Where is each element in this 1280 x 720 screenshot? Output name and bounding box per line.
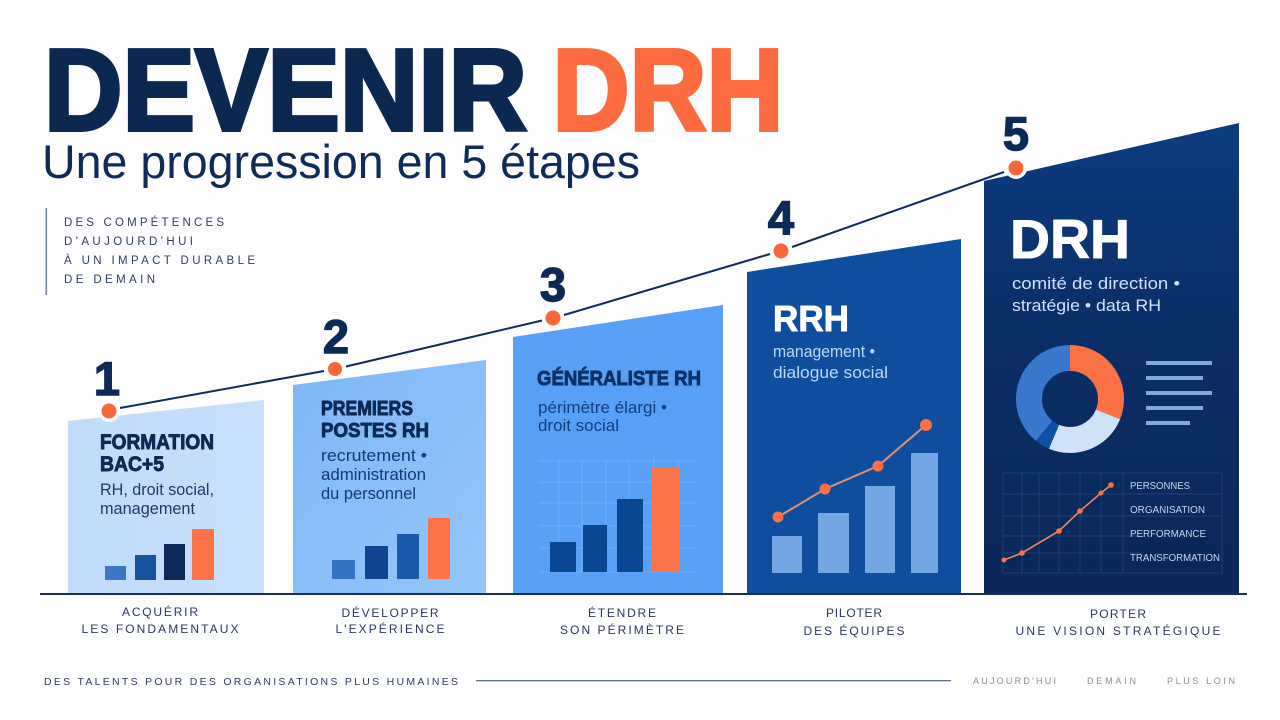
panel 2: premiers postes [293,360,486,594]
panel 4: RRH [747,239,961,594]
baseline [40,593,1247,595]
progression line [120,172,1004,408]
step marker 3: 3 [540,258,566,311]
panel 5: DRH: stratégie • data RH [1012,297,1161,315]
footer tagline: DES TALENTS POUR DES ORGANISATIONS PLUS HUMAINES [44,676,458,688]
caption 3: SON PÉRIMÈTRE [560,622,684,637]
caption 2: L'EXPÉRIENCE [336,621,444,636]
footer labels [973,676,1235,686]
panel 3: généraliste: GÉNÉRALISTE RH [537,367,701,390]
panel 2: premiers postes: du personnel [321,485,416,503]
line chart with grid [1002,473,1222,573]
panel 4: RRH: management • [773,343,875,361]
chart labels: PERFORMANCE [1130,529,1206,540]
caption 4 [804,606,904,638]
panel 5: DRH [984,123,1239,594]
subtitle: Une progression en 5 étapes [42,135,640,188]
intro text block: À UN IMPACT DURABLE [64,254,255,267]
panel 1: formation: RH, droit social, [100,481,214,499]
panel 2: premiers postes: PREMIERS [321,397,413,420]
panel 1: formation: FORMATION [100,431,214,454]
intro text block: DE DEMAIN [64,274,155,286]
chart labels: ORGANISATION [1130,505,1205,516]
panel 5: DRH: comité de direction • [1012,275,1180,293]
bar chart 1 [105,529,214,580]
panel 5: DRH: DRH [1010,208,1130,270]
caption 2: DÉVELOPPER [342,605,439,620]
caption 3: ÉTENDRE [588,605,656,620]
intro text block: D'AUJOURD'HUI [64,236,193,248]
bar and line chart 4 [772,419,938,573]
panel 1: formation: BAC+5 [100,453,164,476]
footer labels: AUJOURD'HUI [973,676,1056,686]
chart labels: PERSONNES [1130,481,1190,492]
panel 4: RRH: dialogue social [773,364,888,382]
step marker 4: 4 [768,191,794,244]
caption 5: PORTER [1090,607,1146,621]
chart labels: TRANSFORMATION [1130,553,1220,564]
donut chart [1029,358,1111,440]
caption 5 [1016,607,1220,638]
bar chart 2 [332,518,450,579]
caption 3 [560,605,684,637]
panel 4: RRH: RRH [773,298,849,339]
caption 4: PILOTER [826,606,882,620]
legend bars [1146,361,1212,425]
caption 5: UNE VISION STRATÉGIQUE [1016,623,1220,638]
intro text block: DES COMPÉTENCES [64,216,224,229]
step marker 5: 5 [1003,107,1029,160]
step marker 2: 2 [323,310,349,363]
intro text block [46,208,255,295]
caption 4: DES ÉQUIPES [804,623,904,638]
bar chart 3 with grid [539,455,698,572]
footer labels: DEMAIN [1087,676,1136,686]
panel 1: formation: management [100,500,195,518]
panel 2: premiers postes: administration [321,466,426,484]
caption 1: ACQUÉRIR [122,604,198,619]
step marker 1: 1 [94,352,120,405]
caption 1 [82,604,238,636]
panel 3: généraliste [513,305,723,594]
panel 2: premiers postes: recrutement • [321,447,427,465]
panel 3: généraliste: périmètre élargi • [538,399,667,417]
panel 2: premiers postes: POSTES RH [321,419,429,442]
panel 1: formation [68,400,264,594]
title: DRH [552,25,784,155]
footer labels: PLUS LOIN [1167,676,1235,686]
chart labels [1130,481,1220,564]
title: DEVENIR [44,25,527,155]
title [44,25,784,155]
caption 1: LES FONDAMENTAUX [82,622,238,636]
caption 2 [336,605,444,636]
panel 3: généraliste: droit social [538,417,619,435]
